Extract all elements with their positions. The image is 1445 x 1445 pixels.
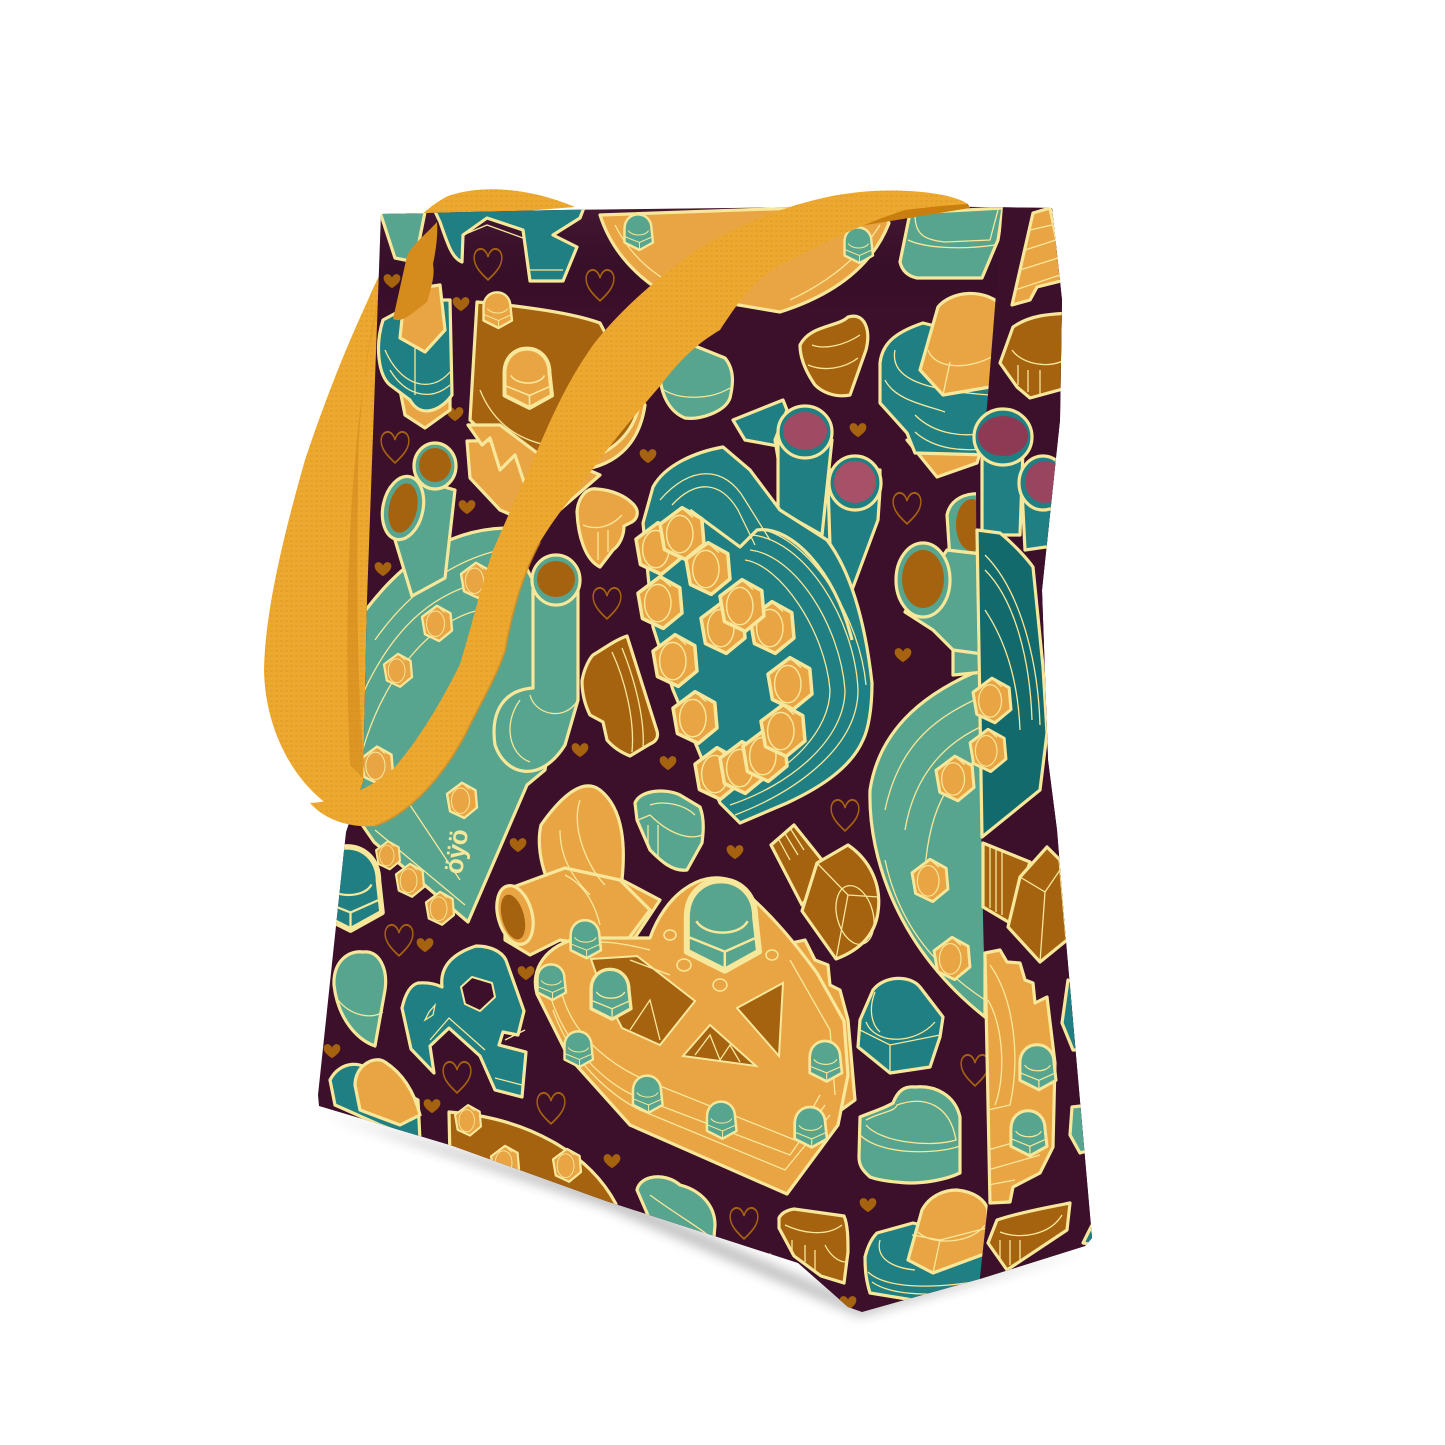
openings [591,956,695,1045]
pipes on left heart [377,443,456,596]
bottom right stack [865,1190,988,1300]
teal wrench [402,946,526,1097]
brown heart centre left [582,636,658,756]
top-left light teal fragment [380,212,425,262]
left dark teal nut [336,844,385,933]
elbow pipe [494,555,580,771]
small strap loop [393,222,437,320]
side: teal pieces right [1062,980,1085,1050]
side: lower brown heart [988,1203,1070,1270]
side: orange piece top [1012,208,1065,305]
front strap [310,190,970,826]
right light teal heart [859,1087,960,1183]
side: brown bolt [983,843,1067,962]
gear teeth [794,938,857,1112]
bottom teal heart [637,1177,715,1262]
teal nuts [687,880,759,971]
top orange heart arc [600,205,889,312]
left light teal heart [334,952,386,1046]
small outline hearts [381,249,1057,1239]
bag body with printed pattern [300,190,1110,1330]
top right light teal block [900,208,1003,278]
side: orange gear [985,950,1056,1203]
twin pipes [733,400,881,590]
teal heart near top center [660,346,732,418]
inner heart edge [690,510,852,640]
light teal side-crossing heart and pipes [870,494,990,1017]
logo mark: öÿö [438,827,474,876]
ground shadow [319,1112,1085,1316]
top teal wrench [432,205,585,281]
side: pipes with pink openings [974,409,1067,550]
top lobes [539,786,660,960]
brown half gear with bolts [467,292,645,527]
bottom brown heart with bolts [449,1105,616,1220]
upper brown pipe [945,492,976,552]
left teal stack with orange nut [379,285,452,428]
brown hex bolt [771,825,880,959]
side gusset panel [970,206,1110,1330]
bottom dark teal sliver [748,1255,780,1285]
pipe with brown opening [903,548,978,655]
connector [951,650,978,677]
big orange heart with teal nuts [491,786,855,1194]
heart body [535,878,848,1194]
bottom brown heart right [779,1209,848,1283]
tote bag product illustration [264,189,1092,1321]
right top stack [880,293,1007,477]
side: brown heart top [1000,313,1070,398]
bottom left stack [330,1060,420,1140]
back strap [264,189,575,830]
left big light teal heart [345,443,580,925]
side: dark teal body [977,530,1047,837]
right dark teal nut [858,978,943,1073]
heart body [870,668,985,1017]
bag background fabric [300,190,1110,1330]
ring of hex bolts [636,508,812,799]
brown heart top right [800,316,868,396]
orange heart at center top [577,489,637,567]
small filled hearts [324,274,1063,1310]
teal heart below main heart [635,791,703,870]
main dark teal heart [636,400,881,823]
